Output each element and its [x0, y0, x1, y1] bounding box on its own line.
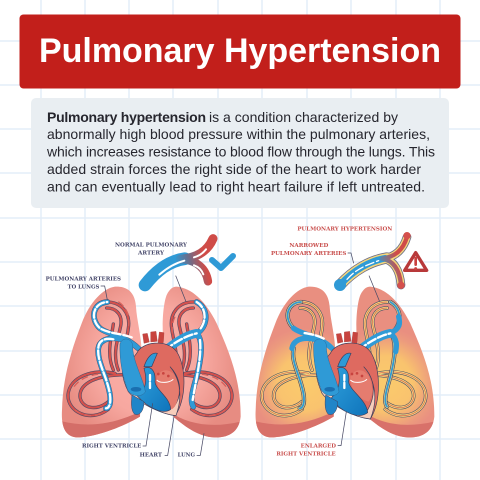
left lung [62, 286, 142, 438]
narrowed artery icon [334, 232, 411, 291]
blue arteries [94, 302, 206, 408]
title: Pulmonary Hypertension [39, 32, 441, 70]
blue arteries [288, 302, 399, 408]
heart [314, 331, 378, 419]
diagram: pulmonary hypertension lungs [250, 227, 440, 457]
heart [120, 331, 184, 416]
red arteries right [171, 302, 232, 416]
label: pulmonary arteries to lungs: PULMONARY ARTERIES [46, 276, 121, 282]
label: pulmonary arteries: PULMONARY ARTERIES [271, 251, 346, 257]
label: artery: ARTERY [137, 251, 164, 257]
label: enlarged: ENLARGED [301, 443, 336, 449]
narrowed arteries [262, 302, 426, 416]
left lung [256, 286, 336, 438]
label: heart: HEART [140, 453, 163, 459]
right lung [356, 287, 440, 443]
description panel: is a condition characterized by [209, 109, 398, 125]
description panel: abnormally high blood pressure within the pulmonary arteries, [47, 126, 430, 142]
title banner [20, 14, 460, 88]
label: narrowed: NARROWED [289, 243, 329, 249]
description panel [31, 98, 449, 208]
icon: warning triangle [405, 253, 427, 270]
label: to lungs: TO LUNGS [68, 284, 99, 290]
diagram: normal lungs [46, 239, 247, 459]
label: right ventricle: RIGHT VENTRICLE [82, 443, 141, 449]
description panel: which increases resistance to blood flow through the lungs. This [46, 144, 435, 160]
red arteries left [68, 302, 129, 416]
description panel: and can eventually lead to right heart failure if left untreated. [47, 178, 425, 194]
leader lines [101, 276, 204, 455]
label: pulmonary hypertension: PULMONARY HYPERTENSION [297, 227, 392, 233]
right lung [163, 287, 247, 443]
description panel: Pulmonary hypertension [47, 109, 206, 125]
label: lung: LUNG [178, 453, 195, 459]
icon: check mark [212, 256, 233, 268]
description panel: added strain forces the right side of the heart to work harder [47, 161, 421, 177]
leader lines [338, 253, 380, 446]
label: right ventricle: RIGHT VENTRICLE [276, 451, 336, 457]
label: normal pulmonary artery: NORMAL PULMONARY [115, 243, 187, 249]
normal artery icon [145, 239, 213, 285]
